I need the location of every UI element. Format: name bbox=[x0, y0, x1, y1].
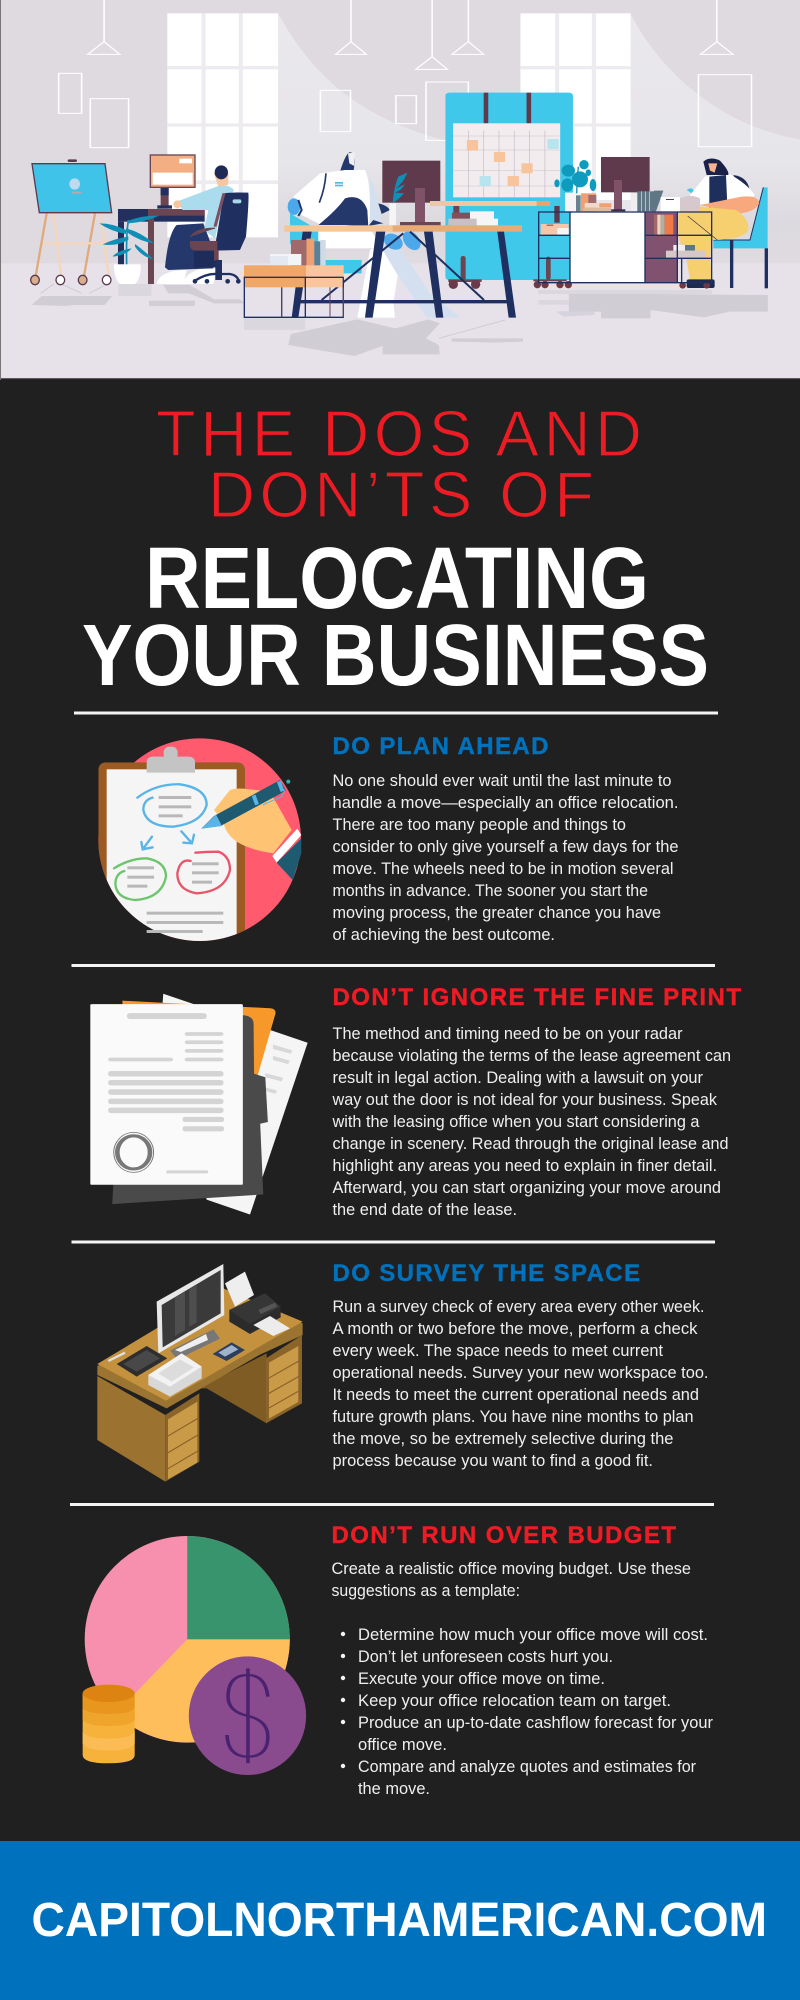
potted plant bbox=[99, 216, 159, 284]
body text: do plan ahead: move. The wheels need to be in motion several bbox=[332, 860, 674, 878]
monitor bbox=[601, 157, 650, 211]
easel with screen bbox=[31, 159, 112, 285]
body text: do plan ahead: There are too many people and things to bbox=[332, 816, 626, 834]
body text: do plan ahead: months in advance. The sooner you start the bbox=[332, 882, 648, 900]
title line: relocating your business bbox=[82, 530, 709, 704]
body text: budget intro: suggestions as a template: bbox=[332, 1582, 520, 1600]
pot plant bbox=[554, 160, 596, 211]
body text: do plan ahead: No one should ever wait until the last minute to bbox=[332, 772, 672, 790]
body text: do survey the space: Run a survey check of every area every other week. bbox=[332, 1298, 704, 1316]
title line: the dos and don'ts of: THE DOS AND bbox=[156, 397, 642, 470]
bullet list: budget suggestions: Compare and analyze quotes and estimates for bbox=[358, 1758, 696, 1776]
body text: do plan ahead: consider to only give yourself a few days for the bbox=[332, 838, 678, 856]
easel, left desk and seated man bbox=[31, 155, 249, 285]
body text: don't ignore the fine print: change in scenery. Read through the original lease and bbox=[332, 1135, 728, 1153]
body text: don't ignore the fine print bbox=[332, 1025, 731, 1219]
body text: don't ignore the fine print: way out the door is not ideal for your business. Speak bbox=[332, 1091, 718, 1109]
body text: do survey the space: every week. The space needs to meet current bbox=[332, 1342, 663, 1360]
body text: do survey the space: process because you want to find a good fit. bbox=[332, 1452, 653, 1470]
bullet list: budget suggestions: Produce an up-to-date cashflow forecast for your bbox=[358, 1714, 713, 1732]
title line: the dos and don'ts of: DON’TS OF bbox=[208, 458, 594, 531]
office wall, windows, lamps and frames bbox=[0, 0, 800, 380]
books and box side table bbox=[244, 239, 344, 317]
woman and chair bbox=[678, 159, 768, 288]
body text: don't ignore the fine print: with the leasing office when you start considering a bbox=[332, 1113, 700, 1131]
body text: do survey the space bbox=[332, 1298, 708, 1470]
body text: budget intro bbox=[332, 1560, 691, 1600]
footer banner bbox=[0, 1841, 800, 2000]
blue chair bbox=[290, 213, 362, 273]
panel: do plan ahead bbox=[98, 733, 678, 950]
body text: do survey the space: future growth plans. You have nine months to plan bbox=[332, 1408, 694, 1426]
robot bbox=[288, 152, 461, 318]
heading: do survey the space: DO SURVEY THE SPACE bbox=[332, 1260, 640, 1287]
main desk bbox=[284, 225, 522, 318]
body text: do plan ahead bbox=[332, 772, 678, 944]
bullet list: budget suggestions bbox=[341, 1626, 713, 1798]
body text: do survey the space: A month or two before the move, perform a check bbox=[332, 1320, 698, 1338]
body text: budget intro: Create a realistic office moving budget. Use these bbox=[332, 1560, 691, 1578]
back desk shelf and paper stacks bbox=[430, 201, 550, 289]
icon: documents and folder bbox=[90, 994, 308, 1214]
hero illustration: office scene bbox=[0, 0, 800, 380]
body text: do plan ahead: of achieving the best outcome. bbox=[332, 926, 555, 944]
body text: don't ignore the fine print: because violating the terms of the lease agreement can bbox=[332, 1047, 731, 1065]
body text: do survey the space: the move, so be extremely selective during the bbox=[332, 1430, 674, 1448]
heading: do plan ahead: DO PLAN AHEAD bbox=[332, 733, 548, 760]
center desk and robot bbox=[244, 152, 550, 318]
calendar board bbox=[445, 93, 573, 280]
bullet list: budget suggestions: Keep your office relocation team on target. bbox=[358, 1692, 671, 1710]
desk and monitor bbox=[118, 155, 205, 284]
monitor with plant bbox=[382, 161, 441, 225]
body text: don't ignore the fine print: the end date of the lease. bbox=[332, 1201, 517, 1219]
panel: don't ignore the fine print bbox=[90, 984, 741, 1219]
shelving unit bbox=[533, 206, 717, 289]
body text: don't ignore the fine print: highlight any areas you need to explain in finer detail. bbox=[332, 1157, 717, 1175]
title line: relocating your business: RELOCATING bbox=[145, 530, 649, 627]
body text: don't ignore the fine print: Afterward, you can start organizing your move around bbox=[332, 1179, 721, 1197]
body text: don't ignore the fine print: The method and timing need to be on your radar bbox=[332, 1025, 683, 1043]
footer website url: CAPITOLNORTHAMERICAN.COM bbox=[32, 1894, 767, 1947]
bullet list: budget suggestions: Determine how much your office move will cost. bbox=[358, 1626, 708, 1644]
body text: don't ignore the fine print: result in legal action. Dealing with a lawsuit on your bbox=[332, 1069, 704, 1087]
heading: don't ignore the fine print: DON’T IGNORE THE FINE PRINT bbox=[332, 984, 741, 1011]
bullet list: budget suggestions: office move. bbox=[358, 1736, 447, 1754]
body text: do plan ahead: moving process, the greater chance you have bbox=[332, 904, 661, 922]
title bbox=[82, 397, 709, 704]
bullet list: budget suggestions: Execute your office move on time. bbox=[358, 1670, 605, 1688]
seated man bbox=[157, 165, 249, 284]
icon: pie chart with coin stack and dollar coin bbox=[83, 1536, 306, 1775]
desktop books, binders and box bbox=[576, 191, 680, 211]
panel: do survey the space bbox=[97, 1260, 709, 1482]
body text: do survey the space: It needs to meet the current operational needs and bbox=[332, 1386, 699, 1404]
icon: clipboard in pink circle bbox=[98, 738, 301, 950]
bullet list: budget suggestions: Don’t let unforeseen costs hurt you. bbox=[358, 1648, 613, 1666]
heading: don't run over budget: DON’T RUN OVER BUDGET bbox=[332, 1522, 676, 1549]
icon: isometric office desk bbox=[97, 1264, 303, 1482]
title line: relocating your business: YOUR BUSINESS bbox=[82, 607, 709, 704]
right desk, plant and woman bbox=[533, 157, 768, 289]
bullet list: budget suggestions: the move. bbox=[358, 1780, 430, 1798]
body text: do plan ahead: handle a move—especially an office relocation. bbox=[332, 794, 678, 812]
panel: don't run over budget bbox=[83, 1522, 713, 1798]
body text: do survey the space: operational needs. Survey your new workspace too. bbox=[332, 1364, 708, 1382]
title line: the dos and don'ts of bbox=[156, 397, 642, 531]
floor shadows bbox=[32, 284, 768, 356]
